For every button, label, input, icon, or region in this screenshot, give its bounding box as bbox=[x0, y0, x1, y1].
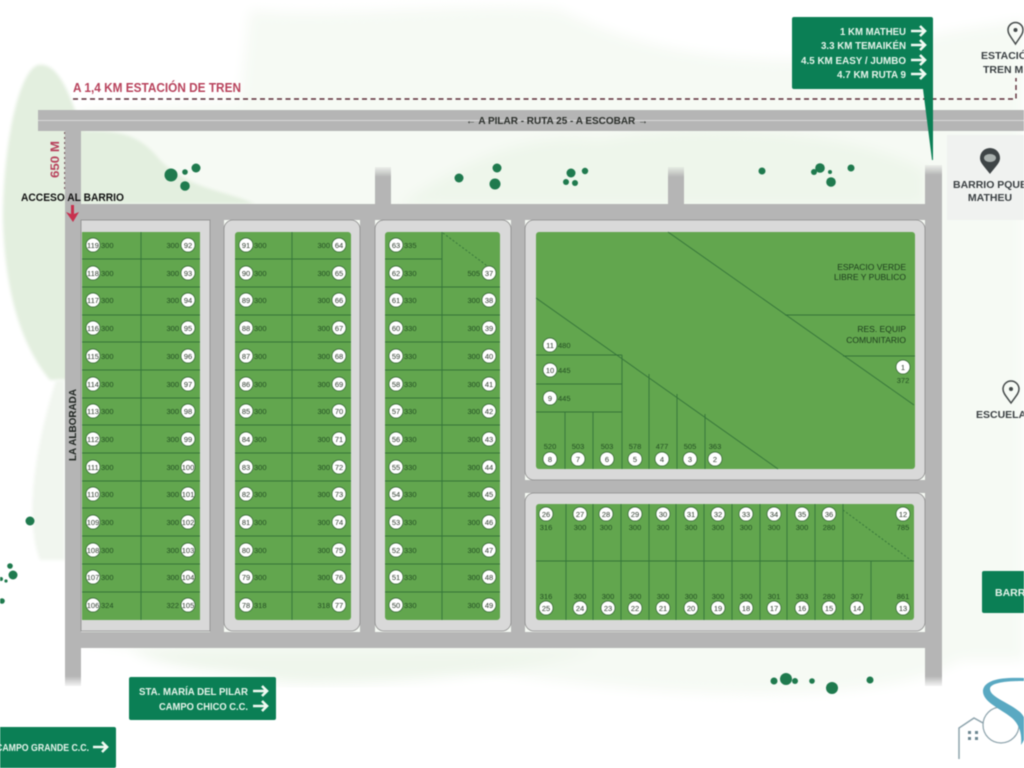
lots 64-77: 75 bbox=[335, 546, 343, 555]
lots 37-49: 300 bbox=[467, 518, 480, 527]
lots 37-49: 49 bbox=[485, 601, 493, 610]
lots 25-13: 20 bbox=[687, 604, 695, 613]
lots 37-49: 46 bbox=[485, 518, 493, 527]
lots 91-78: 318 bbox=[254, 601, 267, 610]
lots 63-50: 330 bbox=[404, 490, 417, 499]
lots 37-49: 38 bbox=[485, 296, 493, 305]
lots 119-106: 324 bbox=[101, 601, 114, 610]
lots 92-105: 300 bbox=[166, 490, 179, 499]
lots 8-2: 6 bbox=[605, 455, 609, 464]
lots 64-77: 300 bbox=[317, 435, 330, 444]
lots 63-50: 59 bbox=[392, 352, 400, 361]
lots 119-106: 119 bbox=[87, 241, 99, 250]
lots 26-36 and 12: 300 bbox=[629, 523, 641, 532]
lots 37-49: 300 bbox=[467, 546, 480, 555]
lots 63-50: 330 bbox=[404, 546, 417, 555]
lots 92-105: 300 bbox=[166, 324, 179, 333]
lots 26-36 and 12: 280 bbox=[823, 523, 835, 532]
lots 25-13: 303 bbox=[796, 592, 808, 601]
lots 25-13: 16 bbox=[798, 604, 806, 613]
lots 91-78: 84 bbox=[242, 435, 250, 444]
lots 91-78: 83 bbox=[242, 463, 250, 472]
road label: Ruta 25: ← A PILAR - RUTA 25 - A ESCOBAR → bbox=[466, 116, 648, 127]
lots 92-105: 300 bbox=[166, 380, 179, 389]
lots 26-36 and 12: 27 bbox=[576, 510, 584, 519]
landmark: train station: TREN M bbox=[983, 64, 1024, 76]
lots 119-106: 300 bbox=[101, 407, 114, 416]
block 4: green space bbox=[525, 220, 925, 480]
callout: distances bbox=[792, 17, 933, 160]
lots 26-36 and 12: 316 bbox=[540, 523, 552, 532]
lots 92-105: 105 bbox=[182, 601, 194, 610]
lots 25-13: 300 bbox=[685, 592, 697, 601]
lots 64-77: 300 bbox=[317, 324, 330, 333]
lots 91-78: 300 bbox=[254, 573, 267, 582]
block 3 bbox=[375, 220, 511, 631]
lots 63-50: 50 bbox=[392, 601, 400, 610]
lots 64-77: 70 bbox=[335, 407, 343, 416]
lots 63-50: 63 bbox=[392, 241, 400, 250]
callout: distances: 4.5 KM EASY / JUMBO bbox=[801, 55, 906, 67]
lots 37-49: 505 bbox=[467, 269, 480, 278]
lots 119-106: 300 bbox=[101, 490, 114, 499]
lots 26-36 and 12: 300 bbox=[685, 523, 697, 532]
lots 91-78: 300 bbox=[254, 380, 267, 389]
lots 37-49: 42 bbox=[485, 407, 493, 416]
lots 91-78: 85 bbox=[242, 407, 250, 416]
lots 8-2 bbox=[543, 442, 722, 466]
lots 64-77: 66 bbox=[335, 296, 343, 305]
lots 92-105: 96 bbox=[184, 352, 192, 361]
lots 11-9: 9 bbox=[548, 394, 552, 403]
lots 92-105: 100 bbox=[182, 463, 194, 472]
lots 37-49: 300 bbox=[467, 463, 480, 472]
lots 119-106: 118 bbox=[87, 269, 99, 278]
landmark: school bbox=[976, 381, 1024, 421]
lots 11-9: 11 bbox=[546, 341, 554, 350]
lots 91-78: 300 bbox=[254, 269, 267, 278]
lots 92-105: 300 bbox=[166, 296, 179, 305]
lots 91-78: 300 bbox=[254, 352, 267, 361]
lots 92-105: 300 bbox=[166, 463, 179, 472]
lots 26-36 and 12: 300 bbox=[796, 523, 808, 532]
lots 26-36 and 12: 12 bbox=[899, 510, 907, 519]
lots 64-77: 71 bbox=[335, 435, 343, 444]
lots 119-106: 111 bbox=[87, 463, 99, 472]
lots 64-77: 300 bbox=[317, 546, 330, 555]
lots 91-78: 300 bbox=[254, 518, 267, 527]
lots 25-13: 15 bbox=[825, 604, 833, 613]
lots 63-50: 330 bbox=[404, 407, 417, 416]
lots 119-106: 300 bbox=[101, 463, 114, 472]
lots 92-105: 102 bbox=[182, 518, 194, 527]
lots 11-9: 480 bbox=[558, 341, 571, 350]
lots 119-106: 109 bbox=[87, 518, 99, 527]
lots 64-77: 300 bbox=[317, 352, 330, 361]
sign: Santa María del Pilar and Campo Chico: CAMPO CHICO C.C. bbox=[159, 701, 248, 713]
lots 64-77: 300 bbox=[317, 490, 330, 499]
lots 92-105: 300 bbox=[166, 518, 179, 527]
lots 92-105: 104 bbox=[182, 573, 194, 582]
label: reserva equipamiento: COMUNITARIO bbox=[846, 335, 906, 345]
lots 64-77: 300 bbox=[317, 463, 330, 472]
lots 119-106: 115 bbox=[87, 352, 99, 361]
lots 8-2: 8 bbox=[548, 455, 552, 464]
lots 91-78: 300 bbox=[254, 435, 267, 444]
lots 26-36 and 12: 31 bbox=[687, 510, 695, 519]
lots 63-50: 56 bbox=[392, 435, 400, 444]
lots 26-36 and 12: 35 bbox=[798, 510, 806, 519]
lots 63-50: 330 bbox=[404, 269, 417, 278]
lots 25-13: 300 bbox=[574, 592, 586, 601]
label: espacio verde: ESPACIO VERDE bbox=[837, 262, 906, 272]
lots 37-49: 300 bbox=[467, 435, 480, 444]
lots 63-50: 57 bbox=[392, 407, 400, 416]
lots 91-78: 78 bbox=[242, 601, 250, 610]
lots 64-77: 65 bbox=[335, 269, 343, 278]
label: espacio verde: LIBRE Y PUBLICO bbox=[834, 272, 906, 282]
lots 119-106: 108 bbox=[87, 546, 99, 555]
lots 25-13: 22 bbox=[631, 604, 639, 613]
sign: Santa María del Pilar and Campo Chico: STA. MARÍA DEL PILAR bbox=[139, 685, 248, 698]
lots 63-50: 55 bbox=[392, 463, 400, 472]
lots 64-77: 67 bbox=[335, 324, 343, 333]
lots 8-2: 503 bbox=[601, 442, 613, 451]
lot 1: 372 bbox=[897, 376, 909, 385]
lots 26-36 and 12: 300 bbox=[740, 523, 752, 532]
lots 63-50: 51 bbox=[392, 573, 400, 582]
lots 64-77: 64 bbox=[335, 241, 343, 250]
lots 63-50: 60 bbox=[392, 324, 400, 333]
lots 63-50: 330 bbox=[404, 518, 417, 527]
callout: distances: 4.7 KM RUTA 9 bbox=[837, 69, 906, 81]
lots 11-9: 445 bbox=[558, 366, 571, 375]
lots 92-105: 94 bbox=[184, 296, 192, 305]
lots 63-50: 330 bbox=[404, 296, 417, 305]
lots 91-78: 86 bbox=[242, 380, 250, 389]
lots 119-106: 300 bbox=[101, 573, 114, 582]
lot 1: 1 bbox=[901, 363, 905, 372]
lots 91-78: 300 bbox=[254, 324, 267, 333]
lots 91-78: 300 bbox=[254, 407, 267, 416]
lots 25-13: 861 bbox=[897, 592, 909, 601]
lots 119-106: 106 bbox=[87, 601, 99, 610]
lots 37-49: 47 bbox=[485, 546, 493, 555]
lots 63-50: 54 bbox=[392, 490, 400, 499]
lots 37-49 bbox=[467, 266, 496, 612]
lots 119-106: 300 bbox=[101, 546, 114, 555]
lots 92-105: 300 bbox=[166, 546, 179, 555]
lots 92-105: 300 bbox=[166, 269, 179, 278]
lots 25-13: 17 bbox=[770, 604, 778, 613]
lots 64-77: 318 bbox=[317, 601, 330, 610]
lots 26-36 and 12: 785 bbox=[897, 523, 909, 532]
lots 63-50: 61 bbox=[392, 296, 400, 305]
lots 25-13: 300 bbox=[602, 592, 614, 601]
lots 25-13: 307 bbox=[851, 592, 863, 601]
train distance dashed route bbox=[65, 78, 1016, 190]
lots 119-106: 107 bbox=[87, 573, 99, 582]
lots 37-49: 40 bbox=[485, 352, 493, 361]
lots 91-78: 87 bbox=[242, 352, 250, 361]
block 1 bbox=[81, 220, 210, 631]
lots 37-49: 300 bbox=[467, 296, 480, 305]
lots 119-106: 300 bbox=[101, 435, 114, 444]
lots 64-77: 77 bbox=[335, 601, 343, 610]
lots 91-78: 91 bbox=[242, 241, 250, 250]
lots 63-50: 62 bbox=[392, 269, 400, 278]
lots 64-77: 74 bbox=[335, 518, 343, 527]
lots 26-36 and 12: 300 bbox=[600, 523, 612, 532]
lots 25-13: 300 bbox=[712, 592, 724, 601]
lots 26-36 and 12: 36 bbox=[825, 510, 833, 519]
lots 8-2: 2 bbox=[713, 455, 717, 464]
lots 119-106: 300 bbox=[101, 324, 114, 333]
block 2 bbox=[224, 220, 360, 631]
lots 8-2: 503 bbox=[572, 442, 584, 451]
lots 8-2: 5 bbox=[633, 455, 637, 464]
lots 25-13: 300 bbox=[740, 592, 752, 601]
lots 37-49: 300 bbox=[467, 324, 480, 333]
label: reserva equipamiento: RES. EQUIP bbox=[857, 324, 906, 334]
sign: Barrio bbox=[982, 571, 1024, 613]
lots 63-50: 330 bbox=[404, 380, 417, 389]
lots 25-13 bbox=[539, 592, 910, 615]
lots 63-50: 52 bbox=[392, 546, 400, 555]
lots 64-77: 72 bbox=[335, 463, 343, 472]
lots 91-78: 300 bbox=[254, 463, 267, 472]
lots 92-105: 92 bbox=[184, 241, 192, 250]
lots 8-2: 505 bbox=[684, 442, 696, 451]
lots 25-13: 24 bbox=[576, 604, 584, 613]
lots 26-36 and 12: 30 bbox=[659, 510, 667, 519]
lots 26-36 and 12: 300 bbox=[657, 523, 669, 532]
sign: Santa María del Pilar and Campo Chico bbox=[129, 677, 276, 720]
distance label: train station: A 1,4 KM ESTACIÓN DE TREN bbox=[73, 80, 241, 95]
lots 8-2: 4 bbox=[660, 455, 664, 464]
lots 91-78 bbox=[239, 238, 267, 612]
lots 25-13: 316 bbox=[540, 592, 552, 601]
lots 25-13: 301 bbox=[768, 592, 780, 601]
lots 64-77: 76 bbox=[335, 573, 343, 582]
lots 63-50: 330 bbox=[404, 324, 417, 333]
lots 92-105: 98 bbox=[184, 407, 192, 416]
lots 63-50: 330 bbox=[404, 435, 417, 444]
lots 26-36 and 12: 300 bbox=[712, 523, 724, 532]
lots 8-2: 578 bbox=[629, 442, 641, 451]
landmark: Barrio Parque Matheu bbox=[947, 135, 1024, 220]
lots 91-78: 300 bbox=[254, 546, 267, 555]
lots 26-36 and 12: 26 bbox=[542, 510, 550, 519]
lots 37-49: 43 bbox=[485, 435, 493, 444]
lots 26-36 and 12: 33 bbox=[742, 510, 750, 519]
lots 91-78: 90 bbox=[242, 269, 250, 278]
lots 92-105: 300 bbox=[166, 352, 179, 361]
lots 63-50: 58 bbox=[392, 380, 400, 389]
lots 25-13: 280 bbox=[823, 592, 835, 601]
tree clusters bbox=[0, 163, 874, 694]
lots 37-49: 39 bbox=[485, 324, 493, 333]
callout: distances: 3.3 KM TEMAIKÉN bbox=[821, 39, 906, 52]
lots 37-49: 41 bbox=[485, 380, 493, 389]
lots 64-77: 73 bbox=[335, 490, 343, 499]
street label: La Alborada: LA ALBORADA bbox=[67, 389, 79, 461]
lots 11-9: 445 bbox=[558, 394, 571, 403]
lots 25-13: 18 bbox=[742, 604, 750, 613]
road network bbox=[38, 110, 1024, 686]
lots 64-77: 300 bbox=[317, 573, 330, 582]
lots 92-105: 300 bbox=[166, 435, 179, 444]
lots 37-49: 48 bbox=[485, 573, 493, 582]
lots 8-2: 7 bbox=[576, 455, 580, 464]
lots 64-77: 68 bbox=[335, 352, 343, 361]
lots 92-105: 300 bbox=[166, 407, 179, 416]
lots 63-50: 330 bbox=[404, 601, 417, 610]
lots 91-78: 300 bbox=[254, 490, 267, 499]
lots 37-49: 44 bbox=[485, 463, 493, 472]
lots 25-13: 23 bbox=[604, 604, 612, 613]
lots 64-77: 300 bbox=[317, 380, 330, 389]
lots 91-78: 300 bbox=[254, 241, 267, 250]
lots 37-49: 300 bbox=[467, 380, 480, 389]
block 5 bbox=[525, 493, 925, 631]
lots 11-9: 10 bbox=[546, 366, 554, 375]
lots 11-9 bbox=[543, 338, 571, 405]
lots 37-49: 300 bbox=[467, 601, 480, 610]
icon: access arrow bbox=[66, 205, 79, 222]
lots 26-36 and 12: 28 bbox=[602, 510, 610, 519]
lots 8-2: 520 bbox=[544, 442, 556, 451]
lots 119-106 bbox=[86, 238, 114, 612]
lots 64-77: 300 bbox=[317, 241, 330, 250]
sign: Campo Grande bbox=[0, 727, 116, 768]
lots 64-77: 300 bbox=[317, 518, 330, 527]
lots 26-36 and 12: 34 bbox=[770, 510, 778, 519]
lots 26-36 and 12: 300 bbox=[768, 523, 780, 532]
lots 92-105: 95 bbox=[184, 324, 192, 333]
lots 92-105: 97 bbox=[184, 380, 192, 389]
lots 63-50: 330 bbox=[404, 573, 417, 582]
lots 119-106: 117 bbox=[87, 296, 99, 305]
lots 119-106: 300 bbox=[101, 518, 114, 527]
lots 64-77: 300 bbox=[317, 407, 330, 416]
lots 8-2: 363 bbox=[709, 442, 721, 451]
lots 37-49: 300 bbox=[467, 352, 480, 361]
lots 25-13: 21 bbox=[659, 604, 667, 613]
lots 91-78: 82 bbox=[242, 490, 250, 499]
lots 26-36 and 12: 29 bbox=[631, 510, 639, 519]
lots 26-36 and 12 bbox=[539, 507, 910, 532]
lots 37-49: 300 bbox=[467, 407, 480, 416]
landmark: train station bbox=[981, 22, 1024, 76]
lots 25-13: 300 bbox=[657, 592, 669, 601]
lots 64-77: 69 bbox=[335, 380, 343, 389]
lots 91-78: 79 bbox=[242, 573, 250, 582]
lots 92-105: 101 bbox=[182, 490, 194, 499]
lots 92-105: 300 bbox=[166, 241, 179, 250]
lots 91-78: 88 bbox=[242, 324, 250, 333]
lots 119-106: 300 bbox=[101, 380, 114, 389]
lots 119-106: 300 bbox=[101, 241, 114, 250]
landmark: Barrio Parque Matheu: MATHEU bbox=[968, 192, 1012, 204]
lots 92-105: 300 bbox=[166, 573, 179, 582]
lots 119-106: 300 bbox=[101, 352, 114, 361]
lots 37-49: 300 bbox=[467, 490, 480, 499]
lots 25-13: 300 bbox=[629, 592, 641, 601]
callout: distances: 1 KM MATHEU bbox=[840, 26, 906, 38]
lots 63-50: 330 bbox=[404, 352, 417, 361]
lots 92-105: 322 bbox=[166, 601, 179, 610]
lots 37-49: 300 bbox=[467, 573, 480, 582]
lots 119-106: 300 bbox=[101, 269, 114, 278]
lots 119-106: 110 bbox=[87, 490, 99, 499]
lots 91-78: 81 bbox=[242, 518, 250, 527]
lots 37-49: 37 bbox=[485, 269, 493, 278]
lots 119-106: 114 bbox=[87, 380, 99, 389]
logo bbox=[959, 678, 1024, 759]
lots 63-50: 330 bbox=[404, 463, 417, 472]
lots 91-78: 89 bbox=[242, 296, 250, 305]
lots 64-77 bbox=[317, 238, 346, 612]
lots 92-105: 99 bbox=[184, 435, 192, 444]
access label: ACCESO AL BARRIO bbox=[21, 192, 124, 204]
lots 119-106: 116 bbox=[87, 324, 99, 333]
lots 119-106: 113 bbox=[87, 407, 99, 416]
lots 92-105: 93 bbox=[184, 269, 192, 278]
lots 26-36 and 12: 300 bbox=[574, 523, 586, 532]
lots 63-50 bbox=[389, 238, 417, 612]
lots 91-78: 80 bbox=[242, 546, 250, 555]
lots 63-50: 335 bbox=[404, 241, 417, 250]
lots 25-13: 19 bbox=[714, 604, 722, 613]
lots 64-77: 300 bbox=[317, 269, 330, 278]
lots 92-105 bbox=[166, 238, 195, 612]
lots 64-77: 300 bbox=[317, 296, 330, 305]
lots 26-36 and 12: 32 bbox=[714, 510, 722, 519]
lots 91-78: 300 bbox=[254, 296, 267, 305]
lots 8-2: 3 bbox=[688, 455, 692, 464]
lot 1 bbox=[896, 360, 910, 385]
lots 25-13: 14 bbox=[853, 604, 861, 613]
lots 63-50: 53 bbox=[392, 518, 400, 527]
distance label: 650 m: 650 M bbox=[48, 141, 62, 178]
lots 37-49: 45 bbox=[485, 490, 493, 499]
lots 119-106: 300 bbox=[101, 296, 114, 305]
lots 8-2: 477 bbox=[656, 442, 668, 451]
lots 25-13: 13 bbox=[899, 604, 907, 613]
lots 119-106: 112 bbox=[87, 435, 99, 444]
lots 25-13: 25 bbox=[542, 604, 550, 613]
lots 92-105: 103 bbox=[182, 546, 194, 555]
